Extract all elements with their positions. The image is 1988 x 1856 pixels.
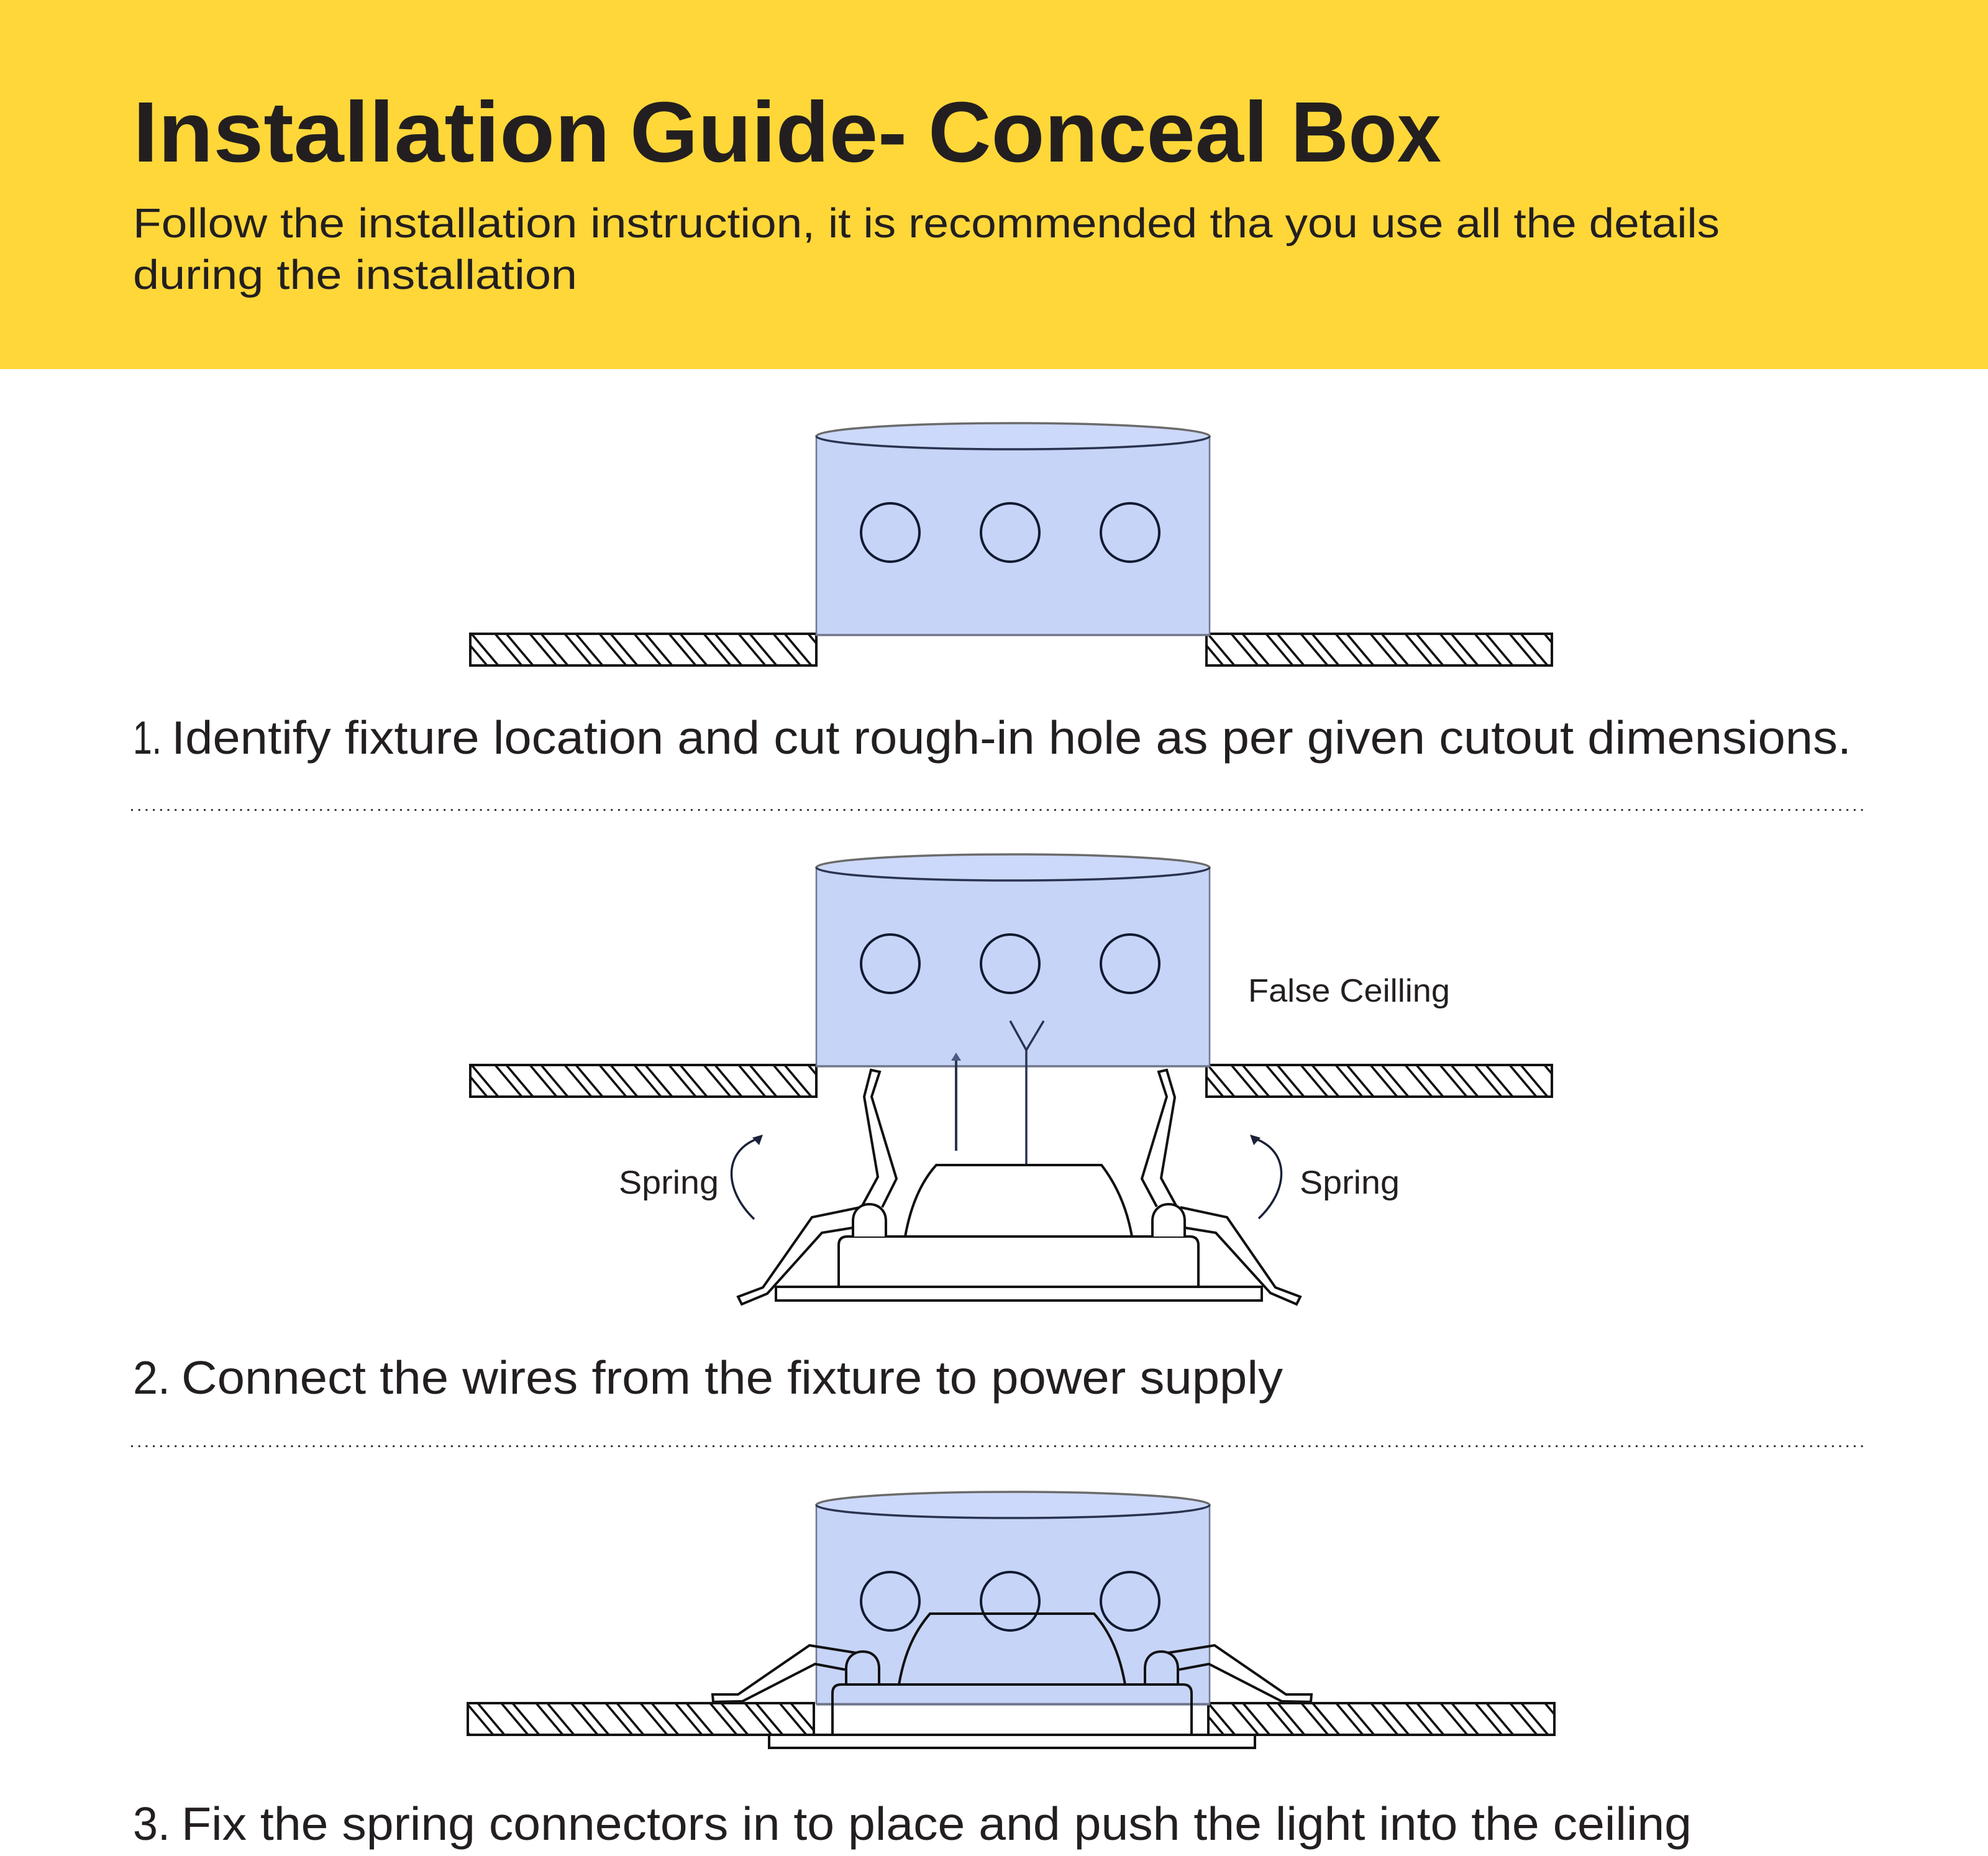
title bbox=[133, 85, 1441, 180]
left bump bbox=[846, 1652, 879, 1685]
wires bbox=[1010, 1021, 1044, 1165]
subtitle: Follow the installation instruction, bbox=[133, 200, 815, 247]
subtitle: it is recommended tha you use all the details bbox=[828, 200, 1720, 247]
left bump bbox=[853, 1204, 886, 1237]
left arm bbox=[738, 1207, 860, 1304]
header band bbox=[0, 0, 1988, 369]
title: Conceal bbox=[928, 85, 1268, 180]
step 1 text: 1. bbox=[133, 711, 162, 764]
diagram 2: connecting fixture bbox=[470, 854, 1552, 1304]
spring arrow right bbox=[1250, 1135, 1282, 1218]
label: spring right: Spring bbox=[1300, 1164, 1400, 1201]
installed fixture bbox=[713, 1614, 1311, 1748]
diagram 1: conceal box above ceiling bbox=[470, 423, 1552, 665]
step 2 text: Connect the wires from the fixture to power supply bbox=[181, 1351, 1284, 1404]
dome bbox=[905, 1165, 1132, 1237]
label: false ceiling: False Ceilling bbox=[1248, 973, 1450, 1009]
body bbox=[839, 1237, 1198, 1287]
title: Installation bbox=[133, 85, 610, 180]
ceiling section left bbox=[470, 634, 816, 665]
dome bbox=[899, 1614, 1125, 1685]
subtitle: during the installation bbox=[133, 252, 577, 298]
label: spring left: Spring bbox=[619, 1164, 719, 1201]
ceiling and box bbox=[468, 1492, 1554, 1735]
right bump bbox=[1152, 1204, 1185, 1237]
step 2 text: 2. bbox=[133, 1351, 170, 1404]
left spring bbox=[862, 1070, 896, 1207]
right arm bbox=[1168, 1645, 1311, 1702]
box and ceiling bbox=[470, 854, 1552, 1097]
title: Guide- bbox=[630, 85, 907, 180]
trim bbox=[776, 1287, 1262, 1301]
title: Box bbox=[1291, 85, 1441, 180]
light fixture bbox=[738, 1070, 1300, 1304]
diagram 3: fixture installed bbox=[468, 1492, 1554, 1748]
right bump bbox=[1145, 1652, 1178, 1685]
step 1 text: Identify fixture location and cut rough-in hole as per given cutout dimensions. bbox=[171, 711, 1851, 764]
right arm bbox=[1180, 1207, 1300, 1304]
trim bbox=[769, 1735, 1255, 1748]
step 3 text: 3. bbox=[133, 1798, 170, 1850]
spring arrow left bbox=[731, 1135, 763, 1219]
ceiling section right bbox=[1206, 634, 1552, 665]
body bbox=[832, 1685, 1192, 1735]
subtitle bbox=[133, 200, 1720, 298]
conceal box bbox=[816, 423, 1210, 635]
right spring bbox=[1142, 1070, 1176, 1207]
step 3 text: Fix the spring connectors in to place and push the light into the ceiling bbox=[181, 1798, 1692, 1850]
up arrow bbox=[951, 1053, 961, 1151]
left arm bbox=[713, 1645, 856, 1702]
